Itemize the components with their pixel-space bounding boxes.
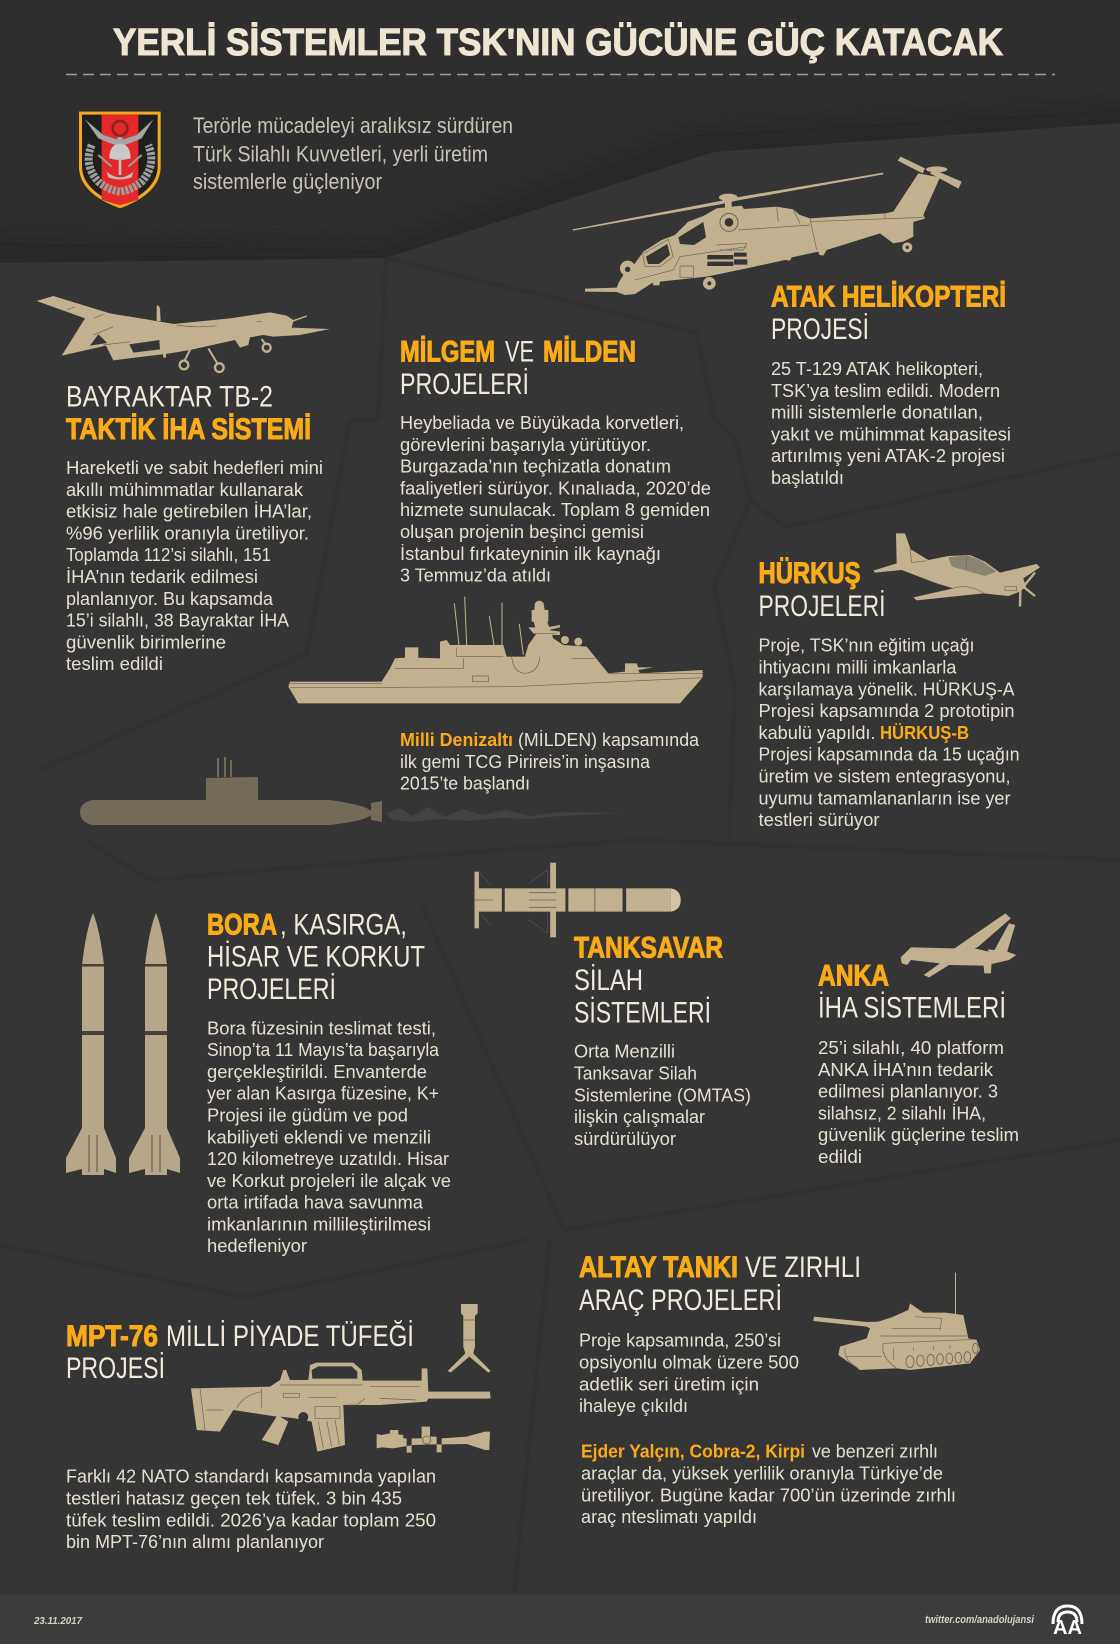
text block: Hareketli ve sabit hedefleri mini — [66, 458, 323, 478]
section: ALTAY tank — [579, 1251, 980, 1527]
icon: rifle — [191, 1363, 491, 1452]
text block: TSK’ya teslim edildi. Modern — [771, 381, 1000, 401]
text block: adetlik seri üretim için — [579, 1374, 759, 1394]
twitter handle: twitter.com/anadolujansi — [925, 1614, 1035, 1626]
intro text: Terörle mücadeleyi aralıksız sürdüren — [193, 113, 513, 138]
text block: kabiliyeti eklendi ve menzili — [207, 1127, 431, 1147]
text block — [771, 359, 1011, 488]
text block: Burgazada’nın teçhizatla donatım — [400, 457, 671, 477]
heading — [400, 336, 636, 401]
section: ATAK helicopter project — [771, 280, 1011, 488]
text block: sürdürülüyor — [574, 1129, 676, 1149]
text block: Sinop’ta 11 Mayıs’ta başarıyla — [207, 1040, 440, 1060]
text block: testleri sürüyor — [758, 810, 880, 830]
icon: missile right — [129, 913, 180, 1175]
text block: armored vehicles: araç nteslimatı yapıldı — [581, 1507, 757, 1527]
heading: SİLAH — [574, 964, 643, 997]
text block: güvenlik güçlerine teslim — [818, 1125, 1019, 1145]
text block: Milli Denizaltı: (MİLDEN) kapsamında — [518, 730, 700, 750]
text block: ANKA İHA’nın tedarik — [818, 1060, 994, 1080]
text block: armored vehicles — [581, 1442, 956, 1527]
heading: PROJELERİ — [207, 973, 336, 1006]
text block: Toplamda 112’si silahlı, 151 — [66, 545, 271, 565]
icon: anti-tank missile — [475, 863, 681, 937]
text block: üretim ve sistem entegrasyonu, — [758, 766, 1010, 786]
heading — [758, 557, 886, 623]
text block: bin MPT-76’nın alımı planlanıyor — [66, 1532, 324, 1552]
icon: ATAK helicopter — [573, 157, 962, 295]
heading: TANKSAVAR — [574, 932, 723, 965]
text block: etkisiz hale getirebilen İHA’lar, — [66, 502, 312, 522]
text block: hizmete sunulacak. Toplam 8 gemiden — [400, 500, 710, 520]
text block: başlatıldı — [771, 468, 844, 488]
text block: İHA’nın tedarik edilmesi — [66, 567, 258, 587]
icon: ANKA drone — [901, 913, 1016, 977]
heading — [207, 908, 425, 1006]
heading: ANKA — [818, 960, 889, 993]
text block: gerçekleştirildi. Envanterde — [207, 1062, 427, 1082]
heading: HİSAR VE KORKUT — [207, 941, 425, 974]
heading: MPT-76 — [66, 1320, 158, 1353]
text block: karşılamaya yönelik. HÜRKUŞ-A — [758, 679, 1014, 699]
heading — [66, 380, 311, 446]
icon: Bayraktar drone — [37, 296, 330, 372]
text block — [574, 1042, 751, 1149]
text block: milli sistemlerle donatılan, — [771, 403, 983, 423]
text block: %96 yerlilik oranıyla üretiliyor. — [66, 523, 309, 543]
heading: PROJESİ — [771, 313, 869, 346]
heading: ARAÇ PROJELERİ — [579, 1284, 782, 1317]
text block: tüfek teslim edildi. 2026’ya kadar toplam 250 — [66, 1510, 436, 1530]
text block: silahsız, 2 silahlı İHA, — [818, 1103, 986, 1123]
heading: ATAK HELİKOPTERİ — [771, 280, 1006, 314]
text block: Projesi kapsamında da 15 uçağın — [758, 745, 1020, 765]
heading: PROJESİ — [66, 1352, 165, 1385]
text block: akıllı mühimmatlar kullanarak — [66, 480, 304, 500]
text block: oluşan projenin beşinci gemisi — [400, 522, 644, 542]
text block: uyumu tamamlananların ise yer — [758, 788, 1010, 808]
heading: MİLGEM — [400, 336, 495, 368]
text block: İstanbul fırkateyninin ilk kaynağı — [400, 544, 661, 564]
heading — [66, 1320, 414, 1385]
section: BORA, KASIRGA — [66, 908, 451, 1256]
text block: Proje, TSK’nın eğitim uçağı — [758, 636, 974, 656]
text block: Projesi kapsamında 2 prototipin — [758, 701, 1014, 721]
icon: corvette ship — [288, 597, 703, 703]
text block: faaliyetleri sürüyor. Kınalıada, 2020’de — [400, 478, 711, 498]
text block: Orta Menzilli — [574, 1042, 675, 1062]
heading: BORA — [207, 908, 277, 941]
text block: ilişkin çalışmalar — [574, 1107, 705, 1127]
text block: HÜRKUŞ-B — [880, 723, 969, 743]
section: MPT-76 — [66, 1304, 491, 1552]
text block: edilmesi planlanıyor. 3 — [818, 1082, 998, 1102]
text block: teslim edildi — [66, 654, 163, 674]
heading: MİLLİ PİYADE TÜFEĞİ — [166, 1320, 414, 1353]
heading: BAYRAKTAR TB-2 — [66, 380, 273, 414]
heading: MİLDEN — [543, 336, 636, 368]
text block: ihtiyacını milli imkanlarla — [758, 658, 958, 678]
text block: opsiyonlu olmak üzere 500 — [579, 1352, 799, 1372]
icon: submarine — [80, 757, 620, 825]
text block: 15’i silahlı, 38 Bayraktar İHA — [66, 611, 289, 631]
heading: PROJELERİ — [400, 368, 529, 401]
text block — [818, 1038, 1019, 1167]
heading — [579, 1251, 861, 1317]
text block: armored vehicles: üretiliyor. Bugüne kadar 700’ün üzerinde zırhlı — [581, 1485, 956, 1505]
heading — [574, 932, 723, 1030]
text block: Tanksavar Silah — [574, 1064, 697, 1084]
text block — [66, 1467, 436, 1552]
text block — [207, 1018, 451, 1256]
footer — [33, 1606, 1082, 1639]
text block: hedefleniyor — [207, 1236, 307, 1256]
text block: Milli Denizaltı — [400, 730, 700, 794]
section: TANKSAVAR — [475, 863, 751, 1149]
heading: PROJELERİ — [758, 590, 886, 623]
icon: tank — [813, 1273, 980, 1370]
text block: armored vehicles: araçlar da, yüksek yerlilik oranıyla Türkiye’de — [581, 1464, 943, 1484]
section: Bayraktar TB-2 — [37, 296, 330, 674]
title: YERLİ SİSTEMLER TSK'NIN GÜCÜNE GÜÇ KATACAK — [113, 21, 1004, 64]
text block: Projesi ile güdüm ve pod — [207, 1106, 408, 1126]
text block: armored vehicles: ve benzeri zırhlı — [812, 1442, 938, 1462]
heading: TAKTİK İHA SİSTEMİ — [66, 413, 311, 446]
heading: ALTAY TANKI — [579, 1251, 738, 1284]
text block: Farklı 42 NATO standardı kapsamında yapılan — [66, 1467, 436, 1487]
text block — [758, 636, 1020, 830]
intro text: Türk Silahlı Kuvvetleri, yerli üretim — [193, 142, 488, 166]
heading: SİSTEMLERİ — [574, 997, 711, 1030]
text block: 25’i silahlı, 40 platform — [818, 1038, 1004, 1058]
text block: Milli Denizaltı: Milli Denizaltı — [400, 730, 513, 750]
section: HÜRKUŞ — [758, 533, 1040, 830]
text block: Milli Denizaltı: 2015’te başlandı — [400, 774, 530, 794]
heading: VE ZIRHLI — [745, 1251, 861, 1284]
text block: 25 T-129 ATAK helikopteri, — [771, 359, 983, 379]
text block: yer alan Kasırga füzesine, K+ — [207, 1084, 439, 1104]
text block: edildi — [818, 1147, 862, 1167]
section: MİLGEM and MİLDEN — [80, 336, 711, 825]
heading: VE — [505, 336, 534, 368]
text block: Sistemlerine (OMTAS) — [574, 1085, 751, 1105]
heading — [818, 960, 1006, 1025]
intro text — [193, 113, 513, 194]
text block: Bora füzesinin teslimat testi, — [207, 1018, 436, 1038]
heading: HÜRKUŞ — [758, 557, 860, 590]
heading: İHA SİSTEMLERİ — [818, 992, 1006, 1025]
text block: armored vehicles: Ejder Yalçın, Cobra-2, Kirpi — [581, 1442, 805, 1462]
heading: , KASIRGA, — [280, 908, 407, 941]
icon: missile left — [66, 913, 116, 1175]
icon: foregrip bipod — [448, 1304, 491, 1373]
text block: 120 kilometreye uzatıldı. Hisar — [207, 1149, 449, 1169]
text block: ve Korkut projeleri ile alçak ve — [207, 1171, 451, 1191]
icon: Anadolu Agency logo: AA — [1053, 1617, 1082, 1639]
text block: planlanıyor. Bu kapsamda — [66, 589, 274, 609]
text block: ihaleye çıkıldı — [579, 1396, 688, 1416]
emblem: Turkish Armed Forces shield — [79, 112, 161, 208]
text block: Heybeliada ve Büyükada korvetleri, — [400, 413, 684, 433]
date: 23.11.2017 — [33, 1616, 82, 1627]
text block: Proje kapsamında, 250’si — [579, 1331, 781, 1351]
intro text: sistemlerle güçleniyor — [193, 169, 382, 194]
text block — [579, 1331, 799, 1416]
text block — [66, 458, 323, 674]
text block: artırılmış yeni ATAK-2 projesi — [771, 446, 1005, 466]
section: ANKA — [818, 913, 1019, 1167]
text block: imkanlarının millileştirilmesi — [207, 1214, 431, 1234]
text block: görevlerini başarıyla yürütüyor. — [400, 435, 651, 455]
text block: kabulü yapıldı. — [758, 723, 876, 743]
text block: yakıt ve mühimmat kapasitesi — [771, 424, 1011, 444]
icon: Hürkuş plane — [873, 533, 1040, 607]
heading — [771, 280, 1006, 346]
text block: güvenlik birimlerine — [66, 632, 226, 652]
text block: 3 Temmuz’da atıldı — [400, 566, 551, 586]
text block: Milli Denizaltı: ilk gemi TCG Pirireis’in inşasına — [400, 752, 651, 772]
icon: Anadolu Agency logo — [1053, 1606, 1082, 1639]
text block: testleri hatasız geçen tek tüfek. 3 bin 435 — [66, 1488, 402, 1508]
icon: rifle scope — [377, 1427, 490, 1453]
text block — [400, 413, 711, 586]
text block: orta irtifada hava savunma — [207, 1193, 424, 1213]
